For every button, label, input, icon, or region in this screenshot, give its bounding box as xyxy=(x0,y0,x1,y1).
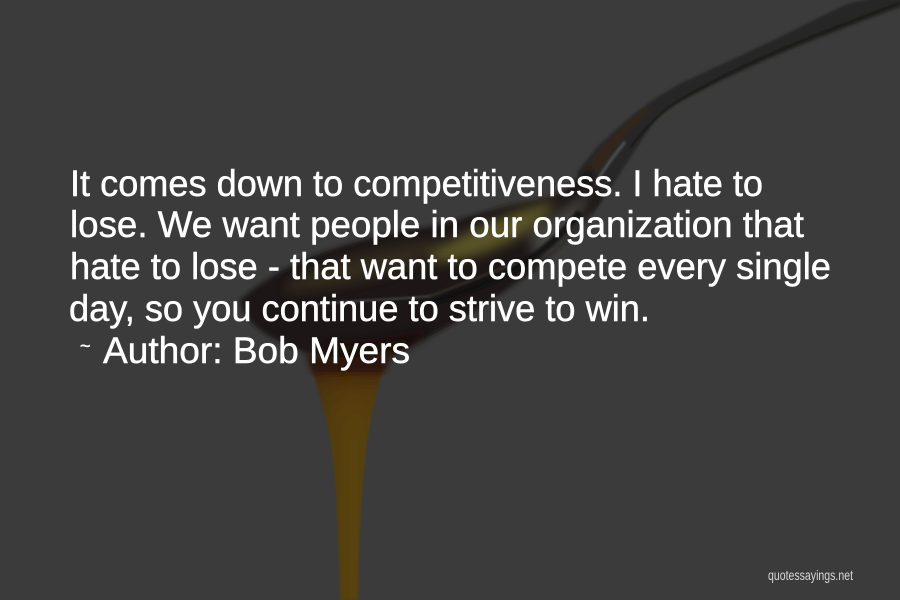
dark bowl crease xyxy=(432,212,580,302)
spoon rim highlight xyxy=(310,296,430,305)
red-brown bowl base xyxy=(320,328,435,362)
quote line 4: day, so you continue to strive to win. xyxy=(69,288,650,329)
upper bowl brown band xyxy=(285,240,440,292)
quote line 1: It comes down to competitiveness. I hate to xyxy=(70,163,763,204)
spoon handle xyxy=(577,0,900,214)
spoon bowl xyxy=(240,167,600,360)
author name: Author: Bob Myers xyxy=(103,330,410,371)
quote line 3: hate to lose - that want to compete every single xyxy=(70,246,831,287)
quote line 2: lose. We want people in our organization that xyxy=(70,204,805,245)
watermark: quotessayings.net xyxy=(768,567,853,583)
tilde: ~ xyxy=(80,336,91,356)
honey stream xyxy=(310,360,385,600)
olive honey highlight xyxy=(432,200,555,262)
author attribution xyxy=(80,330,410,371)
grey bowl reflection xyxy=(530,190,592,262)
spoon and honey photo xyxy=(240,0,900,600)
quote text xyxy=(69,163,831,329)
honey neck under bowl xyxy=(305,350,392,372)
